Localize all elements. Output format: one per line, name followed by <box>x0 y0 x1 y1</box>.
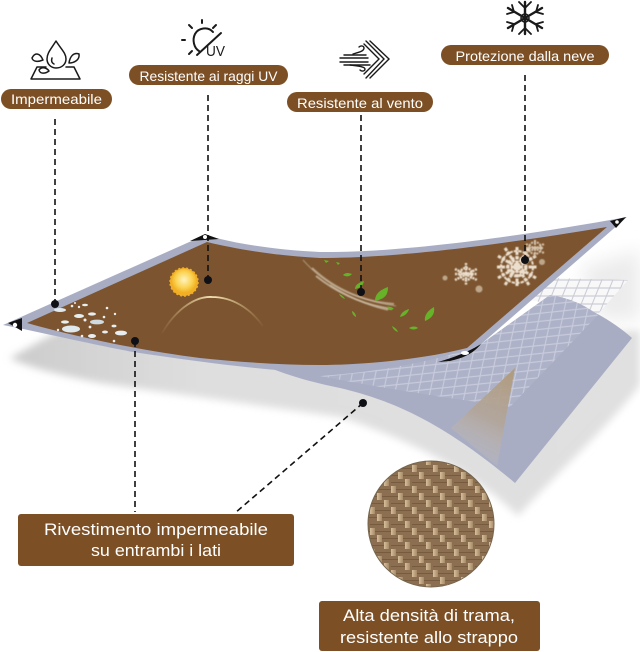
grommet top <box>190 234 219 241</box>
fabric weave circle <box>368 460 494 588</box>
icon: UV sun <box>182 20 225 60</box>
grommet left <box>8 318 22 331</box>
grommet right <box>610 217 626 228</box>
callout: coating: Rivestimento impermeabile <box>44 520 268 539</box>
white mesh layer <box>530 278 628 314</box>
water droplets <box>54 302 127 342</box>
label: neve <box>441 45 609 65</box>
shadow under tarp <box>10 250 640 516</box>
snowflakes <box>442 240 545 292</box>
label: Impermeabile <box>1 89 112 109</box>
callout: weave density <box>319 601 540 651</box>
icon: water drop <box>31 41 80 79</box>
callout: coating <box>18 514 294 566</box>
label: vento <box>287 92 433 112</box>
grommet bottom <box>438 344 481 362</box>
callout: weave density: resistente allo strappo <box>340 628 518 647</box>
marker dots <box>51 256 529 407</box>
label: vento: Resistente al vento <box>297 95 423 111</box>
label: UV: Resistente ai raggi UV <box>140 68 278 84</box>
wind swirl <box>303 260 396 310</box>
icon: snowflake <box>507 2 543 34</box>
icon: UV sun: UV <box>206 43 225 60</box>
callout: coating: su entrambi i lati <box>91 541 221 560</box>
label: neve: Protezione dalla neve <box>456 48 595 64</box>
tarp top edge <box>3 217 627 373</box>
fabric sample beam <box>451 368 515 466</box>
callout: weave density: Alta densità di trama, <box>343 606 515 625</box>
tarp underside <box>270 295 632 483</box>
icon: wind <box>340 41 389 78</box>
light arc <box>162 297 263 333</box>
green leaves <box>324 260 434 332</box>
sun <box>170 268 198 296</box>
leader lines <box>55 75 525 513</box>
tarp brown surface <box>27 227 607 365</box>
label: Impermeabile: Impermeabile <box>11 91 102 107</box>
reinforcement grid <box>320 295 598 407</box>
